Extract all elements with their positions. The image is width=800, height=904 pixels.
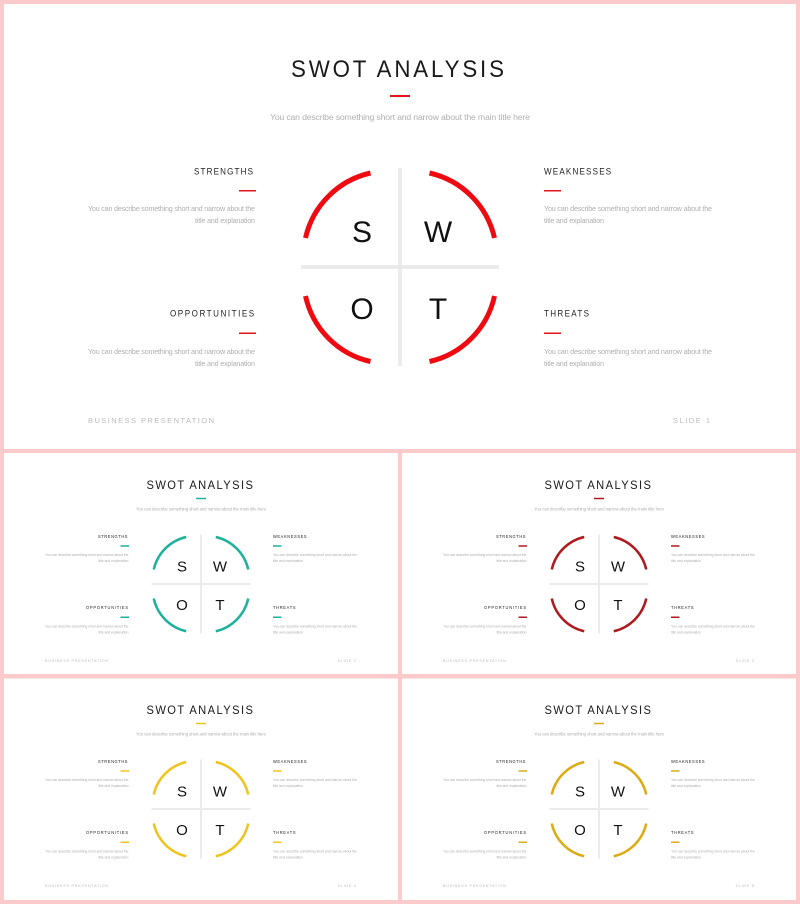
SWOT circle diagram: S	[177, 784, 187, 800]
weaknesses text: You can describe something short and narrow about the	[273, 778, 357, 782]
SWOT circle diagram: O	[176, 822, 188, 839]
weaknesses text: You can describe something short and narrow about the	[273, 553, 357, 557]
title accent	[196, 498, 206, 499]
strengths text: title and explanation	[98, 784, 128, 788]
threats text: You can describe something short and narrow about the	[273, 850, 357, 854]
threats text	[544, 308, 712, 368]
threats text: THREATS	[273, 829, 296, 835]
title: SWOT ANALYSIS	[146, 705, 253, 717]
weaknesses text: WEAKNESSES	[544, 166, 611, 177]
SWOT circle diagram	[550, 534, 648, 634]
opportunities text: title and explanation	[496, 856, 526, 860]
title: SWOT ANALYSIS	[146, 480, 253, 492]
title accent	[594, 498, 604, 499]
SWOT circle diagram	[301, 168, 499, 366]
opportunities text: You can describe something short and narrow about the	[443, 624, 526, 628]
opportunities text: title and explanation	[195, 359, 255, 368]
opportunities text: OPPORTUNITIES	[484, 604, 526, 610]
opportunities text: title and explanation	[496, 630, 526, 634]
SWOT circle diagram: T	[429, 293, 447, 326]
opportunities text: OPPORTUNITIES	[484, 829, 526, 835]
threats text: title and explanation	[273, 856, 303, 860]
weaknesses text: title and explanation	[273, 784, 303, 788]
footer left: BUSINESS PRESENTATION	[45, 659, 108, 663]
opportunities text	[443, 604, 527, 634]
weaknesses text: title and explanation	[544, 216, 604, 225]
title accent	[196, 723, 206, 724]
footer right: SLIDE 1	[673, 416, 710, 425]
opportunities text: OPPORTUNITIES	[170, 308, 254, 319]
opportunities text	[443, 829, 527, 860]
weaknesses text	[671, 533, 755, 563]
weaknesses text: You can describe something short and narrow about the	[671, 553, 755, 557]
weaknesses text: WEAKNESSES	[671, 758, 705, 764]
SWOT circle diagram: W	[611, 558, 626, 576]
weaknesses text: WEAKNESSES	[273, 533, 307, 539]
threats text	[273, 604, 357, 634]
panel: yellow slide	[4, 678, 398, 900]
title accent	[594, 723, 604, 724]
opportunities text: OPPORTUNITIES	[86, 829, 128, 835]
SWOT circle diagram: O	[350, 293, 374, 326]
opportunities text: You can describe something short and narrow about the	[443, 850, 526, 854]
threats text: You can describe something short and narrow about the	[273, 624, 357, 628]
strengths text	[443, 758, 527, 788]
weaknesses text: WEAKNESSES	[273, 758, 307, 764]
threats text: THREATS	[671, 604, 694, 610]
SWOT circle diagram: O	[176, 597, 188, 614]
SWOT circle diagram: W	[213, 784, 228, 800]
threats text: You can describe something short and narrow about the	[671, 624, 755, 628]
threats text: title and explanation	[671, 630, 701, 634]
strengths text	[45, 758, 129, 788]
title accent	[390, 95, 410, 97]
subtitle: You can describe something short and narrow about the main title here	[534, 506, 665, 512]
weaknesses text	[273, 533, 357, 563]
SWOT circle diagram: S	[575, 784, 585, 800]
SWOT circle diagram: T	[613, 822, 623, 839]
strengths text: You can describe something short and narrow about the	[88, 204, 255, 213]
footer left: BUSINESS PRESENTATION	[88, 416, 214, 425]
strengths text: You can describe something short and narrow about the	[443, 553, 526, 557]
weaknesses text: You can describe something short and narrow about the	[671, 778, 755, 782]
threats text: title and explanation	[671, 856, 701, 860]
panel: dark red slide	[402, 453, 796, 674]
weaknesses text: title and explanation	[671, 559, 701, 563]
SWOT circle diagram: W	[611, 784, 626, 800]
threats text	[273, 829, 357, 860]
weaknesses text: WEAKNESSES	[671, 533, 705, 539]
opportunities text	[88, 308, 256, 368]
opportunities text	[45, 604, 129, 634]
SWOT circle diagram: T	[215, 822, 225, 839]
weaknesses text: title and explanation	[671, 784, 701, 788]
SWOT circle diagram	[152, 760, 250, 858]
weaknesses text	[671, 758, 755, 788]
subtitle: You can describe something short and narrow about the main title here	[270, 112, 530, 122]
strengths text	[88, 166, 256, 225]
SWOT circle diagram	[152, 534, 250, 634]
weaknesses text: title and explanation	[273, 559, 303, 563]
opportunities text: You can describe something short and narrow about the	[45, 624, 128, 628]
threats text	[671, 829, 755, 860]
opportunities text	[45, 829, 129, 860]
threats text: THREATS	[671, 829, 694, 835]
opportunities text: title and explanation	[98, 630, 128, 634]
threats text: title and explanation	[273, 630, 303, 634]
SWOT circle diagram	[550, 760, 648, 858]
SWOT circle diagram: W	[424, 216, 453, 249]
subtitle: You can describe something short and narrow about the main title here	[136, 506, 267, 512]
opportunities text: OPPORTUNITIES	[86, 604, 128, 610]
opportunities text: You can describe something short and narrow about the	[88, 347, 255, 356]
strengths text: title and explanation	[98, 559, 128, 563]
strengths text: STRENGTHS	[194, 166, 253, 177]
SWOT circle diagram: W	[213, 558, 228, 576]
weaknesses text: You can describe something short and narrow about the	[544, 204, 712, 213]
SWOT circle diagram: O	[574, 597, 586, 614]
strengths text: title and explanation	[195, 216, 255, 225]
SWOT circle diagram: S	[575, 558, 585, 576]
title: SWOT ANALYSIS	[291, 55, 504, 82]
strengths text	[443, 533, 527, 563]
opportunities text: title and explanation	[98, 856, 128, 860]
strengths text: You can describe something short and narrow about the	[443, 778, 526, 782]
title: SWOT ANALYSIS	[544, 480, 651, 492]
footer right: SLIDE 2	[338, 659, 356, 663]
weaknesses text	[273, 758, 357, 788]
strengths text: title and explanation	[496, 559, 526, 563]
footer left: BUSINESS PRESENTATION	[443, 884, 506, 888]
strengths text: STRENGTHS	[98, 533, 128, 539]
threats text: THREATS	[273, 604, 296, 610]
SWOT circle diagram: S	[177, 558, 187, 576]
footer left: BUSINESS PRESENTATION	[45, 884, 108, 888]
footer right: SLIDE 4	[338, 884, 356, 888]
threats text	[671, 604, 755, 634]
threats text: You can describe something short and narrow about the	[544, 347, 712, 356]
threats text: title and explanation	[544, 359, 604, 368]
strengths text: You can describe something short and narrow about the	[45, 778, 128, 782]
SWOT circle diagram: T	[613, 597, 623, 614]
footer left: BUSINESS PRESENTATION	[443, 659, 506, 663]
panel: main slide, red	[4, 4, 796, 449]
strengths text	[45, 533, 129, 563]
footer right: SLIDE 5	[736, 884, 754, 888]
title: SWOT ANALYSIS	[544, 705, 651, 717]
SWOT circle diagram: O	[574, 822, 586, 839]
strengths text: You can describe something short and narrow about the	[45, 553, 128, 557]
subtitle: You can describe something short and narrow about the main title here	[534, 732, 665, 736]
panel: gold slide	[402, 678, 796, 900]
strengths text: STRENGTHS	[496, 758, 526, 764]
threats text: THREATS	[544, 308, 589, 319]
threats text: You can describe something short and narrow about the	[671, 850, 755, 854]
strengths text: STRENGTHS	[496, 533, 526, 539]
panel: teal slide	[4, 453, 398, 674]
subtitle: You can describe something short and narrow about the main title here	[136, 732, 267, 736]
strengths text: STRENGTHS	[98, 758, 128, 764]
SWOT circle diagram: S	[352, 216, 372, 249]
SWOT circle diagram: T	[215, 597, 225, 614]
footer right: SLIDE 3	[736, 659, 754, 663]
weaknesses text	[544, 166, 712, 225]
strengths text: title and explanation	[496, 784, 526, 788]
opportunities text: You can describe something short and narrow about the	[45, 850, 128, 854]
